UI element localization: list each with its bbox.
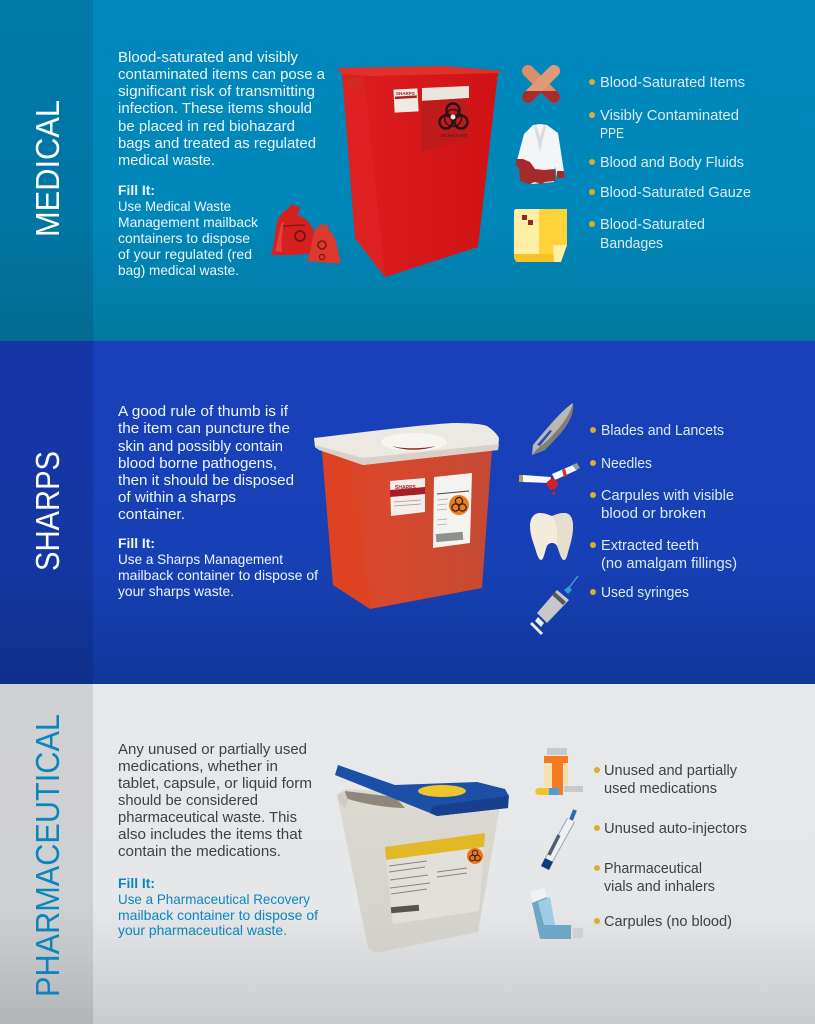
panel: pharmaceutical [0,684,815,1024]
list: medical items: Blood and Body Fluids [600,154,744,171]
text block: medical description: bags and treated as regulated [118,135,316,152]
list: sharps items: Blades and Lancets [601,422,724,439]
list: sharps items: (no amalgam fillings) [601,555,737,572]
icon: red biohazard bags [271,204,341,263]
list: medical items: Blood-Saturated Gauze [600,184,751,201]
panel: medical [0,0,815,341]
text block: sharps fill it [118,535,318,599]
text block: sharps fill it: mailback container to dispose of [118,567,318,583]
icon: lab coat [516,124,565,184]
text block: pharmaceutical description: tablet, capsule, or liquid form [118,775,312,792]
list: medical items: Blood-Saturated Items [600,74,745,91]
list: pharmaceutical items: Carpules (no blood) [604,913,732,930]
text block: pharmaceutical fill it: Use a Pharmaceutical Recovery [118,891,310,907]
list: medical items [589,74,751,252]
text block: sharps description: container. [118,506,185,523]
icon: inhaler [530,888,583,939]
list: pharmaceutical items: Unused and partially [604,762,737,779]
list: sharps items [590,422,737,601]
text block: pharmaceutical fill it: Fill It: [118,875,155,891]
text block: sharps fill it: Use a Sharps Management [118,551,283,567]
list: pharmaceutical items: Unused auto-injectors [604,820,747,837]
label: sharps sticker [393,88,419,113]
text block: sharps fill it: Fill It: [118,535,155,551]
label: sharps management sticker: SHARPS [395,485,417,491]
text block: sharps description: then it should be disposed [118,472,294,489]
text block: medical fill it: Use Medical Waste [118,198,231,214]
text block: medical fill it: Management mailback [118,214,259,230]
icon: medication bottle and pills [535,748,583,795]
text block: sharps description [118,403,294,523]
text block: medical description: medical waste. [118,152,215,169]
label: biohazard sticker [421,86,469,152]
text block: pharmaceutical description: should be considered [118,792,258,809]
text block: sharps description: A good rule of thumb is if [118,403,289,420]
text block: pharmaceutical fill it [118,875,318,938]
list: medical items: PPE [600,125,624,142]
text block: sharps description: the item can puncture the [118,420,290,437]
text block: medical description: be placed in red biohazard [118,118,295,135]
text block: sharps description: of within a sharps [118,489,236,506]
icon: blood-saturated bandage [528,71,554,97]
label: sharps management sticker [390,478,425,516]
text block: pharmaceutical description: also includes the items that [118,826,303,843]
text block: medical fill it: bag) medical waste. [118,262,239,278]
container: red sharps bin [314,423,499,609]
text block: medical description: Blood-saturated and visibly [118,49,298,66]
list: medical items: Blood-Saturated [600,216,705,233]
text block: pharmaceutical description: medications, whether in [118,758,278,775]
text block: pharmaceutical fill it: mailback container to dispose of [118,907,318,923]
list: pharmaceutical items: used medications [604,780,717,797]
text block: medical description [118,49,326,169]
list: sharps items: Used syringes [601,584,689,601]
text block: pharmaceutical fill it: your pharmaceutical waste. [118,922,287,938]
text block: medical description: contaminated items can pose a [118,66,326,83]
label: sharps sticker: SHARPS [396,91,415,96]
text block: medical fill it: containers to dispose [118,230,250,246]
text block: pharmaceutical description: Any unused or partially used [118,741,307,758]
text block: pharmaceutical description: pharmaceutical waste. This [118,809,297,826]
list: sharps items: Carpules with visible [601,487,734,504]
heading: medical: MEDICAL [29,100,66,237]
label: yellow warning band [385,833,485,924]
list: sharps items: blood or broken [601,505,706,522]
icon: extracted tooth [530,513,573,560]
heading: sharps: SHARPS [29,451,66,571]
label: biohazard instruction sticker [433,473,472,548]
list: sharps items: Needles [601,455,652,472]
text block: sharps description: skin and possibly contain [118,438,283,455]
icon: used syringe [531,576,578,634]
text block: medical fill it: Fill It: [118,182,155,198]
text block: medical fill it: of your regulated (red [118,246,252,262]
container: white and blue pharmaceutical bin [335,765,509,953]
text block: medical fill it [118,182,259,278]
list: medical items: Visibly Contaminated [600,107,739,124]
icon: scalpel blade [532,403,573,455]
heading: pharmaceutical: PHARMACEUTICAL [29,714,66,997]
list: sharps items: Extracted teeth [601,537,699,554]
list: medical items: Bandages [600,235,663,252]
label: biohazard sticker: BIOHAZARD [441,133,468,138]
panel: sharps [0,341,815,684]
text block: sharps description: blood borne pathogens, [118,455,277,472]
icon: broken needle carpule [519,463,580,495]
list: pharmaceutical items: Pharmaceutical [604,860,702,877]
list: pharmaceutical items: vials and inhalers [604,878,715,895]
text block: medical description: significant risk of transmitting [118,83,315,100]
text block: medical description: infection. These items should [118,100,312,117]
icon: blood-saturated gauze [514,209,567,262]
container: red regulated medical waste bin [337,66,503,277]
list: pharmaceutical items [594,762,747,930]
icon: auto-injector pen [545,810,575,868]
text block: pharmaceutical description: contain the medications. [118,843,281,860]
text block: pharmaceutical description [118,741,312,860]
text block: sharps fill it: your sharps waste. [118,583,234,599]
